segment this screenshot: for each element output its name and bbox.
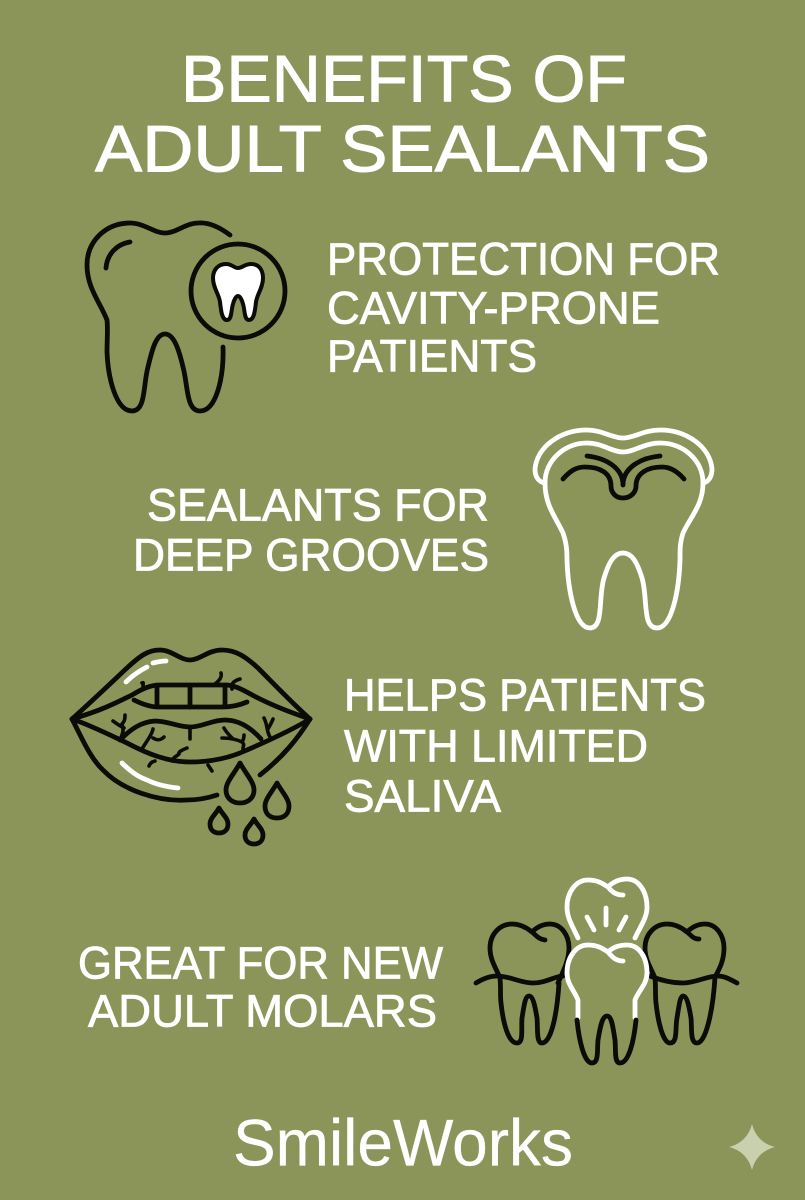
title xyxy=(95,42,710,186)
text: protection for cavity-prone patients: CAVITY-PRONE xyxy=(327,282,660,334)
text: sealants for deep grooves: SEALANTS FOR xyxy=(147,480,489,530)
panel: protection for cavity-prone patients xyxy=(87,223,720,411)
text: great for new adult molars: ADULT MOLARS xyxy=(88,986,437,1036)
text: sealants for deep grooves xyxy=(133,480,489,580)
text: great for new adult molars xyxy=(78,938,444,1036)
text: helps patients with limited saliva: SALIVA xyxy=(344,770,501,822)
icon: sparkle xyxy=(729,1124,775,1170)
lip highlights xyxy=(126,661,166,682)
icon: dry cracked lips with drops xyxy=(72,650,310,844)
drops xyxy=(226,763,254,803)
panel: great for new adult molars xyxy=(78,879,737,1063)
text: helps patients with limited saliva xyxy=(344,670,706,822)
icon: erupting molar between neighbouring molars xyxy=(476,879,737,1063)
upper lip outline xyxy=(72,650,310,719)
top white tooth xyxy=(567,879,647,938)
left molar xyxy=(490,924,569,1043)
right molar xyxy=(645,924,724,1043)
text: protection for cavity-prone patients: PATIENTS xyxy=(327,330,537,382)
panel: sealants for deep grooves xyxy=(133,430,712,628)
icon: tooth with magnified tooth badge xyxy=(87,223,285,411)
cracks xyxy=(113,673,273,771)
text: protection for cavity-prone patients xyxy=(327,234,720,382)
text: helps patients with limited saliva: WITH LIMITED xyxy=(344,720,648,772)
centre tooth roots xyxy=(577,1016,636,1063)
title: ADULT SEALANTS xyxy=(95,112,710,186)
centre tooth crown xyxy=(567,945,647,1018)
mouth lines xyxy=(72,685,310,719)
text: protection for cavity-prone patients: PROTECTION FOR xyxy=(327,234,720,284)
panel: helps patients with limited saliva xyxy=(72,650,706,844)
brand name: SmileWorks xyxy=(233,1106,573,1180)
text: great for new adult molars: GREAT FOR NEW xyxy=(78,938,444,988)
text: sealants for deep grooves: DEEP GROOVES xyxy=(133,530,489,580)
title: BENEFITS OF xyxy=(181,42,627,116)
icon: sealed molar with grooves xyxy=(535,430,712,628)
text: helps patients with limited saliva: HELPS PATIENTS xyxy=(344,670,706,720)
